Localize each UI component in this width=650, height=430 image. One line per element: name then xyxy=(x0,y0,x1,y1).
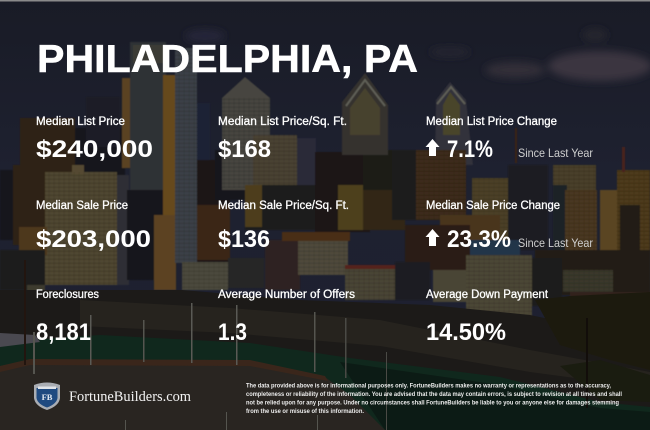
stands xyxy=(0,360,385,430)
stat: median list price change xyxy=(426,116,593,163)
stat: median sale price: $203,000 xyxy=(36,226,151,253)
ground and highway xyxy=(0,290,650,430)
stat: median list price xyxy=(36,116,153,163)
stat: median sale price per square foot: Median Sale Price/Sq. Ft. xyxy=(218,200,349,212)
stat: median list price change: Median List Price Change xyxy=(426,116,557,128)
stat: average down payment: Average Down Payment xyxy=(426,289,549,301)
icon: shield xyxy=(34,382,60,410)
icon: up arrow xyxy=(426,229,440,246)
stat: average number of offers: Average Number of Offers xyxy=(218,289,355,301)
stat: median list price: $240,000 xyxy=(36,136,153,163)
stat: median sale price per square foot xyxy=(218,200,349,253)
stat: foreclosures: 8,181 xyxy=(36,319,91,346)
stat: median list price: Median List Price xyxy=(36,116,125,128)
stat: foreclosures xyxy=(36,289,99,346)
stat: median list price per square foot xyxy=(218,116,347,163)
stat: median sale price change: Median Sale Price Change xyxy=(426,200,560,212)
stat: median sale price xyxy=(36,200,151,253)
stat: median list price change: 7.1% xyxy=(447,136,493,163)
disclaimer text: from the use or misuse of this information. xyxy=(246,408,364,415)
stat: foreclosures: Foreclosures xyxy=(36,289,99,301)
stat: median sale price: Median Sale Price xyxy=(36,200,128,212)
stat: average down payment xyxy=(426,289,549,346)
stat: median list price per square foot: Median List Price/Sq. Ft. xyxy=(218,116,347,128)
icon: up arrow xyxy=(426,139,440,156)
logo: FortuneBuilders xyxy=(34,382,191,410)
disclaimer text: not be relied upon for any purpose. Under no circumstances shall FortuneBuilders be liable to you or anyone else for damages stemming xyxy=(246,400,619,406)
stat: average down payment: 14.50% xyxy=(426,319,506,346)
stat: median list price change: Since Last Year xyxy=(518,146,593,160)
stat: median sale price per square foot: $136 xyxy=(218,226,270,253)
stat: average number of offers: 1.3 xyxy=(218,319,247,346)
stat: median sale price change: Since Last Year xyxy=(518,236,593,250)
stat: median list price per square foot: $168 xyxy=(218,136,271,163)
disclaimer text xyxy=(246,382,622,415)
icon: shield: FB xyxy=(42,392,53,402)
title: PHILADELPHIA, PA xyxy=(37,38,418,81)
wordmark: FortuneBuilders.com xyxy=(69,389,191,405)
stat: median sale price change: 23.3% xyxy=(447,226,511,253)
stat: average number of offers xyxy=(218,289,355,346)
disclaimer text: completeness or reliability of the information. You are advised that the data may contain errors, is subject to revision at all times and shall xyxy=(246,391,622,398)
stat: median sale price change xyxy=(426,200,593,253)
disclaimer text: The data provided above is for informational purposes only. FortuneBuilders makes no warranty or representations as to the accuracy, xyxy=(246,382,611,390)
